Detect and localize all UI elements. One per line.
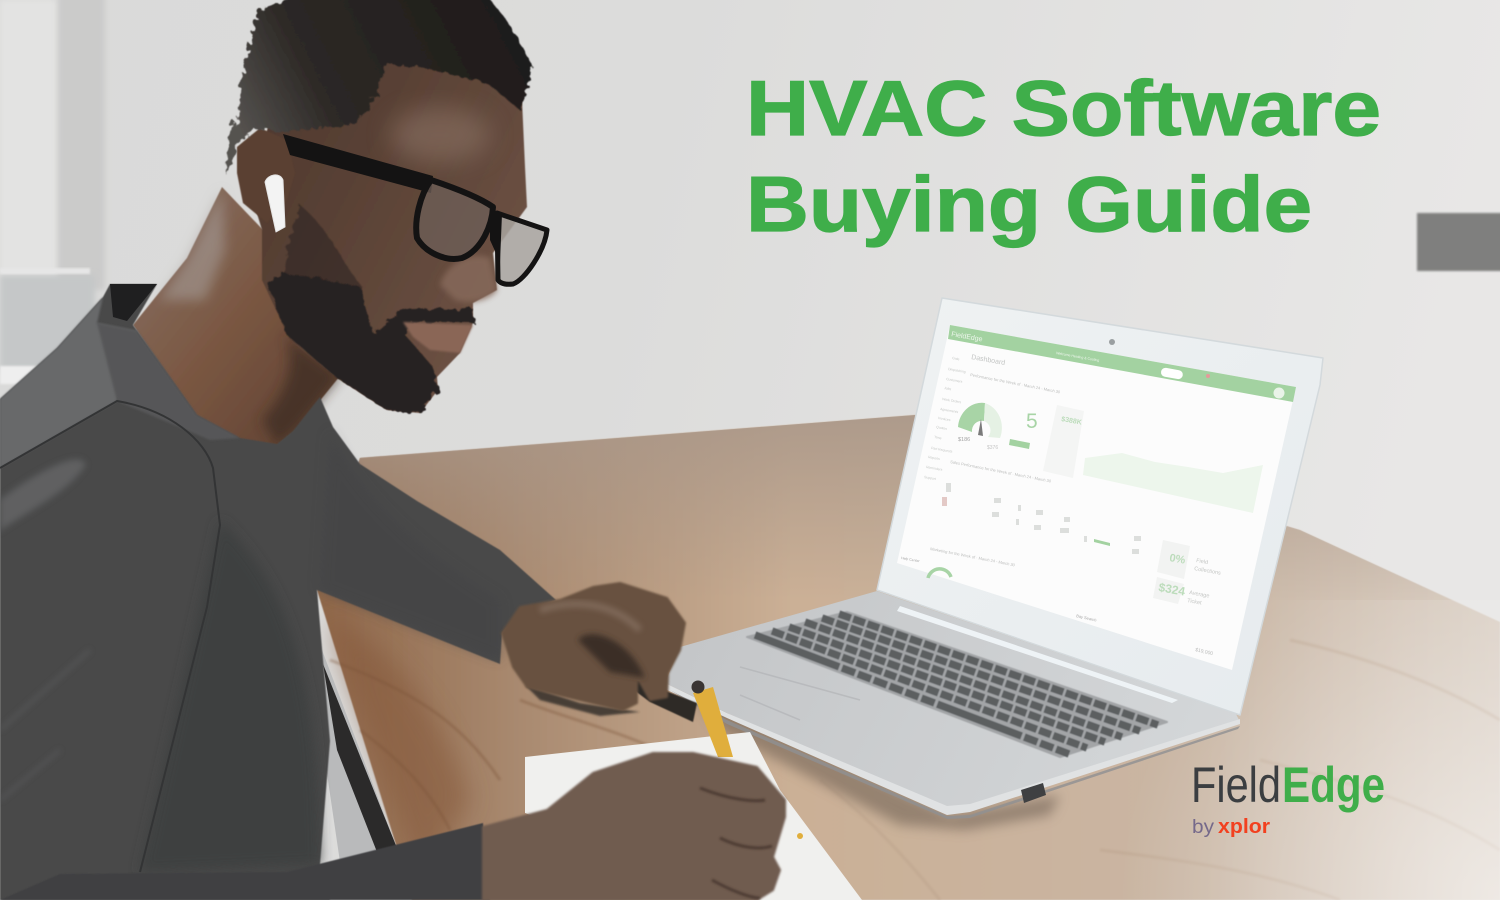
nose — [440, 256, 497, 302]
screen tile: field collections: 0% — [1168, 552, 1186, 567]
laptop shadow — [690, 690, 1060, 830]
finger shadow — [578, 634, 645, 678]
screen sidebar list: Reports — [928, 455, 941, 461]
laptop base — [665, 591, 1240, 819]
writing hand — [483, 753, 785, 900]
shadow under hand — [525, 685, 640, 716]
hand on laptop — [502, 583, 685, 710]
screen webcam — [1109, 339, 1115, 345]
neck highlight — [160, 190, 225, 300]
screen sidebar list: Time — [934, 435, 942, 440]
screen sidebar list: Customers — [946, 377, 963, 384]
screen premium button — [1160, 367, 1184, 380]
hair — [226, 0, 533, 175]
screen area chart — [1083, 453, 1263, 513]
screen sidebar list: Part Requests — [931, 446, 953, 454]
glasses bridge — [490, 208, 502, 262]
screen sidebar list: Invoices — [938, 416, 951, 422]
screen tile: average ticket — [1153, 577, 1210, 607]
laptop USB dongle — [1021, 783, 1046, 803]
screen performance heading: Performance for the Week of · March 24 - March 30 — [970, 372, 1061, 395]
screen dashboard heading: Dashboard — [971, 354, 1006, 367]
by: by — [1192, 817, 1215, 838]
shirt sleeve highlights — [0, 460, 90, 800]
laptop — [665, 298, 1323, 830]
glasses near lens — [416, 180, 493, 259]
screen gauge — [958, 403, 1002, 451]
wordmark: Edge: Edge — [1282, 757, 1385, 813]
shirt shoulder panel — [0, 297, 137, 468]
screen welcome text: Welcome Heating & Cooling — [1056, 351, 1100, 363]
laptop keyboard — [747, 612, 1167, 757]
screen sidebar list: Gate — [952, 356, 960, 361]
person — [0, 0, 862, 900]
pencil — [692, 680, 803, 839]
shirt torso shade — [140, 520, 320, 872]
screen sidebar list: Support — [924, 475, 936, 481]
screen sidebar list: Agreements — [940, 407, 959, 414]
screen tile: average ticket: Average — [1189, 590, 1210, 600]
ear — [237, 128, 295, 223]
screen marketing heading: Marketing for the Week of · March 24 - March 30 — [930, 546, 1016, 568]
title — [746, 64, 1381, 248]
cheek stubble — [283, 205, 362, 310]
wordmark: Field: Field — [1191, 757, 1281, 813]
screen value: $19,000 — [1195, 647, 1214, 657]
glasses far lens — [497, 213, 547, 284]
screen sidebar list: Jobs — [944, 386, 952, 391]
FieldEdge by xplor logo — [1191, 757, 1385, 838]
screen sales table — [942, 483, 1141, 554]
neck — [133, 187, 340, 446]
title line 1: HVAC Software — [746, 64, 1381, 152]
screen tile: field collections: Collections — [1194, 566, 1221, 577]
laptop lid — [877, 298, 1323, 715]
shirt — [0, 284, 556, 900]
screen sales bar — [1094, 539, 1110, 546]
glasses — [283, 134, 547, 284]
face — [250, 40, 527, 413]
notebook — [525, 732, 862, 900]
screen tile: field collections — [1157, 540, 1221, 579]
chair behind person — [322, 650, 397, 862]
screen progress bar — [1009, 439, 1030, 449]
screen help chip: Help Center — [901, 556, 921, 563]
lower sleeve — [0, 823, 490, 900]
laptop screen — [897, 325, 1296, 670]
title line 2: Buying Guide — [746, 160, 1312, 248]
shirt neckband — [97, 323, 240, 440]
screen sidebar list: Work Orders — [942, 397, 962, 404]
screen bay search row: Bay Search — [1076, 613, 1097, 623]
knuckle highlight — [540, 604, 640, 630]
finger creases — [700, 788, 772, 898]
screen stat panel — [1043, 405, 1084, 478]
lips — [403, 322, 473, 353]
glasses temple — [283, 134, 433, 193]
screen tile: average ticket: Ticket — [1187, 598, 1202, 607]
screen user avatar — [1274, 388, 1284, 398]
forehead highlight — [390, 107, 490, 163]
screen stat value: $388K — [1061, 416, 1082, 427]
beard — [267, 273, 474, 413]
screen sidebar list: Reminders — [926, 465, 943, 472]
shirt collar inner — [110, 284, 157, 321]
earbud — [265, 175, 285, 232]
screen tile: average ticket: $324 — [1157, 580, 1187, 599]
under-jaw shadow — [262, 335, 340, 446]
xplor: xplor — [1218, 816, 1270, 838]
dark device on desk — [603, 667, 697, 722]
screen logo: FieldEdge — [951, 331, 983, 343]
screen header bar — [948, 325, 1296, 402]
shirt sleeve seam — [0, 401, 220, 872]
screen stat number: 5 — [1026, 410, 1038, 433]
screen tile: field collections: Field — [1196, 558, 1208, 566]
screen sidebar list — [924, 356, 966, 481]
screen sales heading: Sales Performance for the Week of · March 24 - March 30 — [950, 459, 1052, 484]
shirt arm shade — [320, 430, 500, 660]
screen sidebar list: Quotes — [936, 425, 948, 431]
screen gauge: $186 — [958, 437, 970, 443]
screen donut — [928, 569, 951, 578]
screen sidebar list: Dispatching — [948, 367, 966, 374]
wooden table — [317, 415, 1500, 900]
screen gauge: $376 — [987, 445, 998, 451]
screen alert badge — [1206, 374, 1210, 378]
